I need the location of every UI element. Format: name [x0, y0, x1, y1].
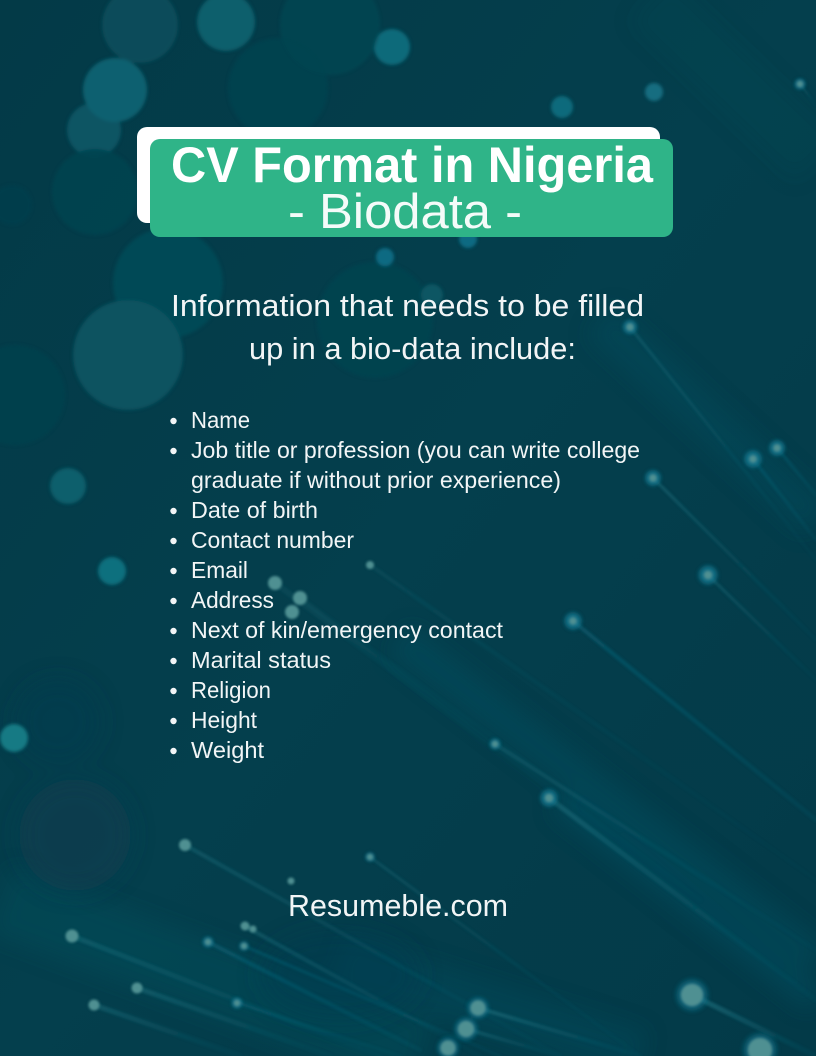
bullet list: Religion [191, 677, 271, 703]
bullet list: Address [191, 587, 274, 613]
bullet list: Height [191, 707, 258, 733]
bullet list: Contact number [191, 527, 354, 553]
subtitle: - Biodata - [288, 185, 522, 239]
white backing card [137, 127, 660, 223]
bullet list: Name [191, 407, 250, 433]
intro text [171, 288, 644, 366]
bullet markers [170, 418, 177, 754]
footer website: Resumeble.com [288, 888, 508, 923]
bullet list: Job title or profession (you can write college [191, 437, 640, 463]
bullet list: Email [191, 557, 248, 583]
bullet list: Next of kin/emergency contact [191, 617, 504, 643]
bullet list: Weight [191, 737, 265, 763]
bullet list: Marital status [191, 647, 331, 673]
bullet list: Date of birth [191, 497, 318, 523]
dark blue bokeh [16, 680, 420, 1020]
title: CV Format in Nigeria [171, 137, 654, 193]
intro text: Information that needs to be filled [171, 288, 644, 323]
bullet list [170, 407, 640, 763]
bullet list: graduate if without prior experience) [191, 467, 561, 493]
title banner [137, 127, 673, 239]
teal bokeh [0, 0, 663, 752]
green title card [150, 139, 673, 237]
intro text: up in a bio-data include: [249, 331, 576, 366]
